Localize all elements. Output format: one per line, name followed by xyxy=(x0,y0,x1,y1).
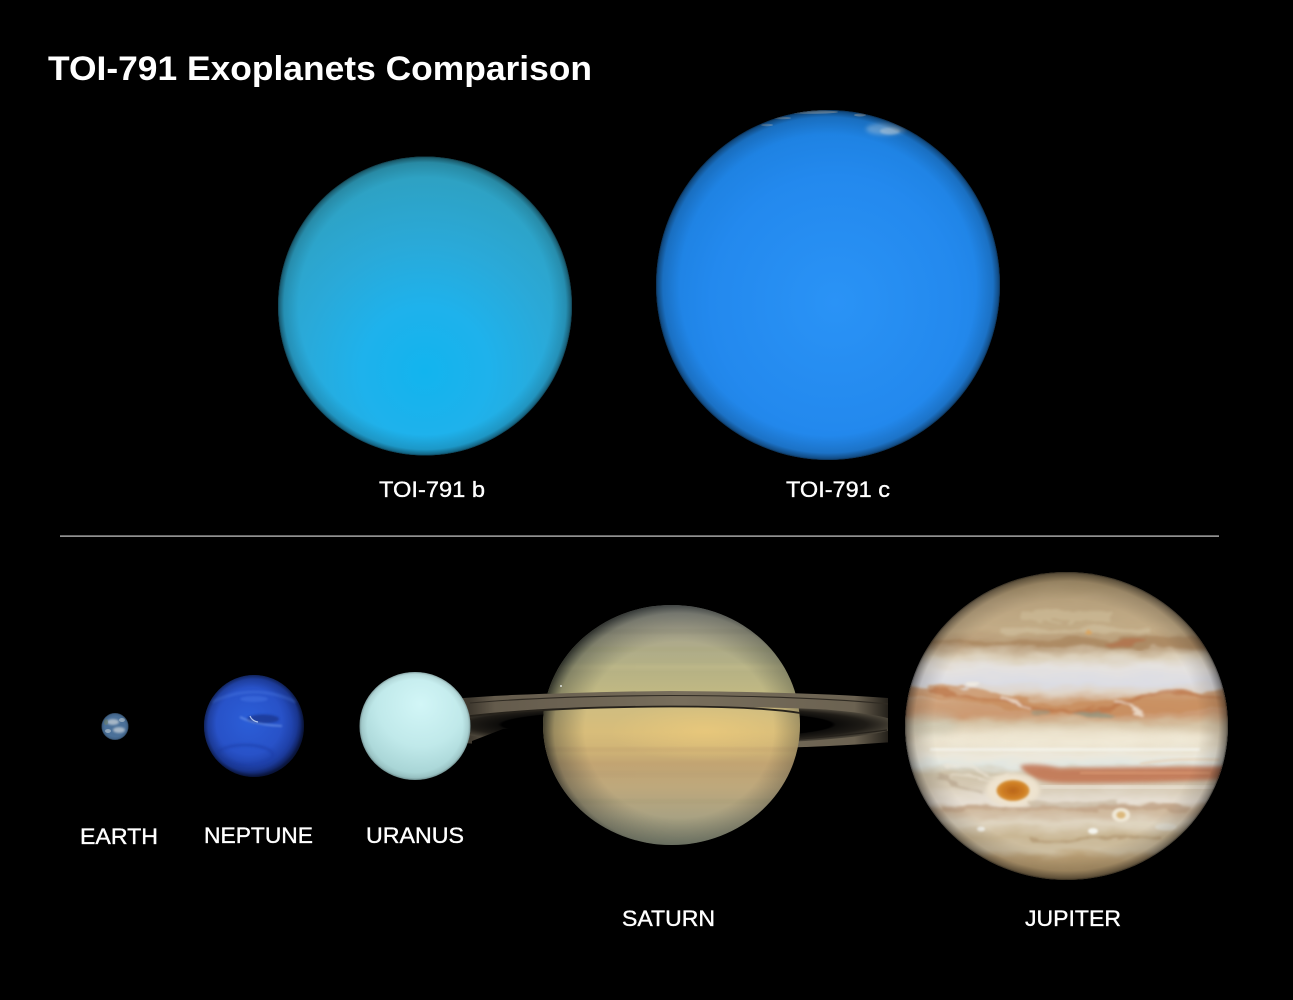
Jupiter turbulent wake xyxy=(938,764,995,794)
planet: TOI-791 b xyxy=(278,156,572,456)
Saturn moon speck xyxy=(560,685,562,687)
clouds on TOI-791 c xyxy=(761,110,906,135)
planet: TOI-791 c xyxy=(656,110,1000,460)
Jupiter south equatorial red band xyxy=(1020,760,1230,788)
label: Neptune: NEPTUNE xyxy=(204,823,313,848)
Jupiter north equatorial band xyxy=(905,683,1230,717)
label: TOI-791 c: TOI-791 c xyxy=(786,477,890,502)
planet: Uranus xyxy=(360,672,470,780)
label: TOI-791 b: TOI-791 b xyxy=(379,477,485,502)
Jupiter equatorial zone highlights xyxy=(916,729,1216,747)
divider line xyxy=(60,536,1219,537)
label: Uranus: URANUS xyxy=(366,823,464,848)
planet: Jupiter xyxy=(905,572,1228,880)
Jupiter upper mottled band xyxy=(947,609,1206,651)
Jupiter southern streak xyxy=(940,801,1190,841)
label: Earth: EARTH xyxy=(80,824,158,849)
label: Jupiter: JUPITER xyxy=(1025,906,1121,931)
planet: Earth xyxy=(102,713,128,740)
title: TOI-791 Exoplanets Comparison xyxy=(48,50,592,88)
Saturn globe xyxy=(540,605,810,845)
ring: near side in front of the planet xyxy=(470,691,888,716)
label: Saturn: SATURN xyxy=(622,906,715,931)
planet: Saturn with rings xyxy=(462,605,888,845)
Jupiter white ovals xyxy=(977,808,1177,834)
Jupiter base bands xyxy=(905,572,1228,880)
ring: far side behind the planet xyxy=(462,694,888,748)
planet: Neptune xyxy=(204,675,304,777)
Jupiter Great Red Spot xyxy=(986,773,1040,807)
